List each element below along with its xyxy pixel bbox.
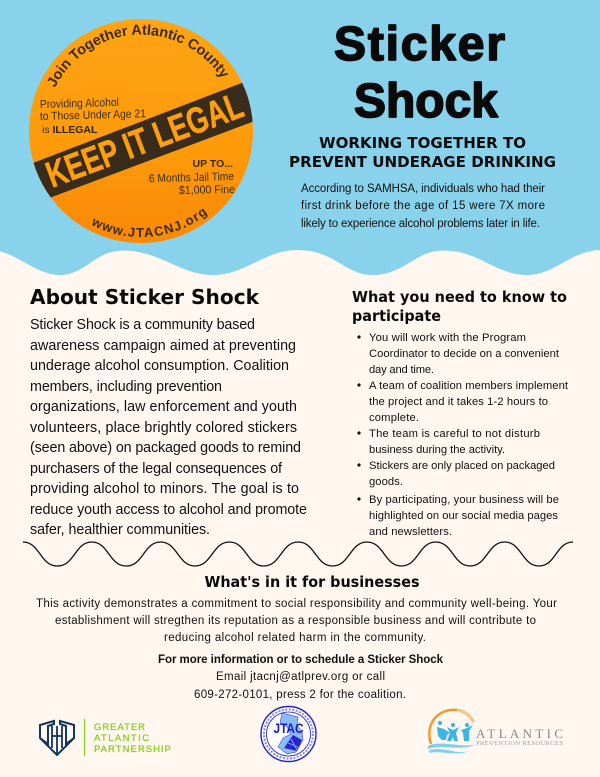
about text block: members, including prevention xyxy=(30,379,222,395)
bullet 2: complete. xyxy=(369,412,419,424)
logo waves xyxy=(428,744,475,749)
sticker band text: KEEP IT LEGAL xyxy=(40,85,249,195)
logo shield xyxy=(40,721,74,755)
bullet 4: goods. xyxy=(369,476,403,488)
logo: atlantic prevention resources xyxy=(428,710,563,754)
sticker right text: $1,000 Fine xyxy=(179,184,235,197)
wavy divider xyxy=(23,542,573,566)
sticker right text xyxy=(149,158,235,197)
logo: greater atlantic partnership xyxy=(40,719,171,756)
heading: about sticker shock: About Sticker Shock xyxy=(30,285,260,309)
sticker top arc text: Join Together Atlantic County xyxy=(48,24,228,87)
bullet 4 xyxy=(357,460,555,488)
businesses text xyxy=(36,598,557,644)
subtitle xyxy=(289,134,556,171)
about text block: reduce youth access to alcohol and promote xyxy=(30,502,307,518)
bullet 2 xyxy=(357,380,569,424)
bullet 3: The team is careful to not disturb xyxy=(369,428,540,440)
heading: what you need to know: participate xyxy=(352,307,441,325)
logo wordmark: GREATER xyxy=(94,722,145,733)
about text block: Sticker Shock is a community based xyxy=(30,317,255,333)
about text block: providing alcohol to minors. The goal is to xyxy=(30,481,299,497)
bullet 5: highlighted on our social media pages xyxy=(369,510,558,522)
logo: jtac xyxy=(261,706,316,762)
sticker right text: 6 Months Jail Time xyxy=(149,171,234,185)
about text block: awareness campaign aimed at preventing xyxy=(30,338,296,354)
logo people xyxy=(437,721,473,741)
bullet 5: and newsletters. xyxy=(369,526,452,538)
bullet 5: By participating, your business will be xyxy=(369,494,559,506)
title: Sticker xyxy=(334,18,505,71)
about text block: organizations, law enforcement and youth xyxy=(30,399,297,415)
blue header panel with wavy edge xyxy=(0,0,600,275)
heading: what's in it for businesses: What's in it for businesses xyxy=(204,573,420,591)
statistic text: likely to experience alcohol problems later in life. xyxy=(301,218,540,230)
contact information: Email jtacnj@atlprev.org or call xyxy=(216,671,385,683)
about text block: (seen above) on packaged goods to remind xyxy=(30,440,301,456)
subtitle: WORKING TOGETHER TO xyxy=(319,134,526,152)
bullet 1: You will work with the Program xyxy=(369,332,526,344)
sticker band xyxy=(34,82,252,198)
bullet 2: the project and it takes 1-2 hours to xyxy=(369,396,548,408)
statistic text: first drink before the age of 15 were 7X more xyxy=(301,200,545,212)
sticker left text xyxy=(40,97,146,136)
sticker graphic xyxy=(29,19,253,243)
sticker disc xyxy=(29,19,253,243)
logo: jtac: JTAC xyxy=(274,720,304,736)
subtitle: PREVENT UNDERAGE DRINKING xyxy=(289,153,556,171)
heading: what you need to know: What you need to know to xyxy=(352,288,567,306)
logo wordmark xyxy=(94,722,171,755)
about text block: safer, healthier communities. xyxy=(30,522,210,538)
bullet 3 xyxy=(357,428,540,456)
bullet 1: Coordinator to decide on a convenient xyxy=(369,348,560,360)
bullet 4: Stickers are only placed on packaged xyxy=(369,460,555,472)
about text block xyxy=(30,317,307,538)
sticker left text: to Those Under Age 21 xyxy=(40,108,146,123)
statistic text: According to SAMHSA, individuals who had their xyxy=(301,183,545,195)
contact information: For more information or to schedule a Sticker Shock xyxy=(158,654,444,666)
bullet 5 xyxy=(357,494,559,538)
title xyxy=(334,18,505,128)
bullet 1 xyxy=(357,332,560,376)
bullet 1: day and time. xyxy=(369,364,434,376)
businesses text: reducing alcohol related harm in the community. xyxy=(164,632,426,644)
sticker bottom arc text: www.JTACNJ.org xyxy=(92,208,208,238)
bullet 3: business during the activity. xyxy=(369,444,505,456)
logo: atlantic prevention resources: PREVENTION RESOURCES xyxy=(476,740,563,747)
statistic text xyxy=(301,183,545,230)
sticker left text: Providing Alcohol xyxy=(40,97,119,111)
bullet list xyxy=(357,332,569,538)
logo wordmark: ATLANTIC xyxy=(94,733,149,744)
bullet 2: A team of coalition members implement xyxy=(369,380,569,392)
contact information xyxy=(158,654,444,701)
heading: what you need to know xyxy=(352,288,567,325)
sticker left text: is ILLEGAL xyxy=(42,124,98,136)
about text block: purchasers of the legal consequences of xyxy=(30,461,282,477)
businesses text: establishment will stregthen its reputation as a responsible business and will contribute to xyxy=(55,615,536,627)
logo: atlantic prevention resources: ATLANTIC xyxy=(476,726,563,741)
businesses text: This activity demonstrates a commitment to social responsibility and community well-being. Your xyxy=(36,598,557,610)
title: Shock xyxy=(354,75,498,128)
about text block: volunteers, place brightly colored stickers xyxy=(30,420,297,436)
about text block: underage alcohol consumption. Coalition xyxy=(30,358,289,374)
logo wordmark: PARTNERSHIP xyxy=(94,744,171,755)
sticker right text: UP TO... xyxy=(193,158,233,170)
contact information: 609-272-0101, press 2 for the coalition. xyxy=(194,689,406,701)
